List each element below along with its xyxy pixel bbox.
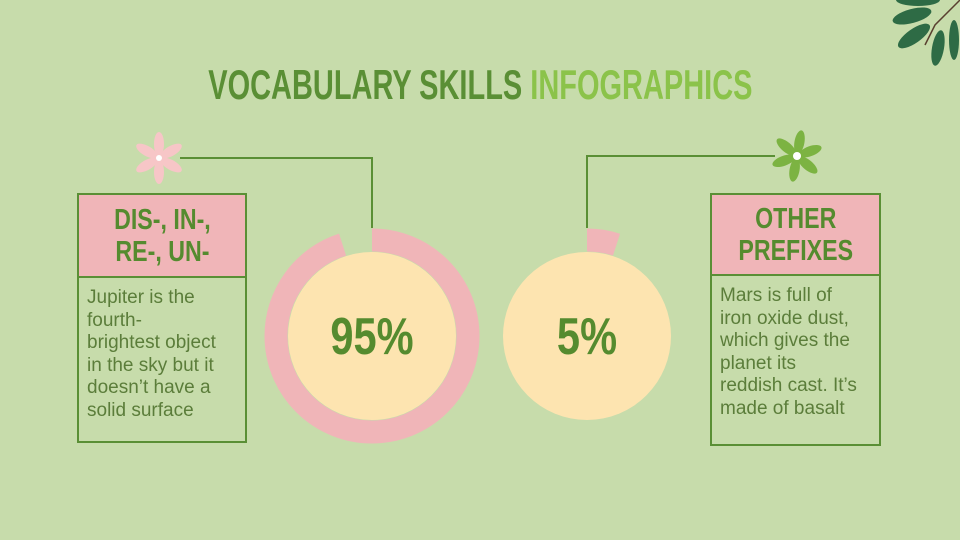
text block: planet its (720, 352, 796, 374)
text block: which gives the (720, 330, 850, 351)
text block: Mars is full of (720, 285, 832, 306)
heading: other prefixes: PREFIXES (738, 234, 853, 266)
chart: 5% donut (503, 228, 671, 420)
text block: doesn’t have a (87, 377, 211, 398)
text block: Jupiter is the (87, 287, 195, 308)
chart: 95% donut: 95% (330, 307, 414, 365)
heading: DIS- IN- RE- UN-: DIS-, IN-, (114, 204, 210, 236)
text block: brightest object (87, 332, 216, 353)
text block: made of basalt (720, 398, 845, 418)
chart: 5% donut: 5% (557, 307, 617, 365)
chart: 95% donut (264, 228, 480, 444)
title: VOCABULARY SKILLS INFOGRAPHICS (208, 61, 752, 108)
text block: in the sky but it (87, 354, 214, 376)
heading: other prefixes (712, 195, 879, 276)
heading: DIS- IN- RE- UN-: RE-, UN- (115, 236, 209, 268)
panel: left prefixes (77, 193, 247, 443)
heading: DIS- IN- RE- UN- (79, 195, 245, 278)
text block: fourth- (87, 310, 142, 330)
text block (87, 287, 216, 420)
text block (720, 285, 857, 418)
icon: green flower (772, 130, 822, 182)
decorative leaves (892, 0, 960, 66)
text block: reddish cast. It’s (720, 375, 857, 396)
heading: other prefixes: OTHER (755, 202, 836, 234)
text block: iron oxide dust, (720, 308, 849, 328)
text block: solid surface (87, 400, 194, 420)
panel: other prefixes (710, 193, 881, 446)
icon: pink flower (136, 132, 182, 184)
